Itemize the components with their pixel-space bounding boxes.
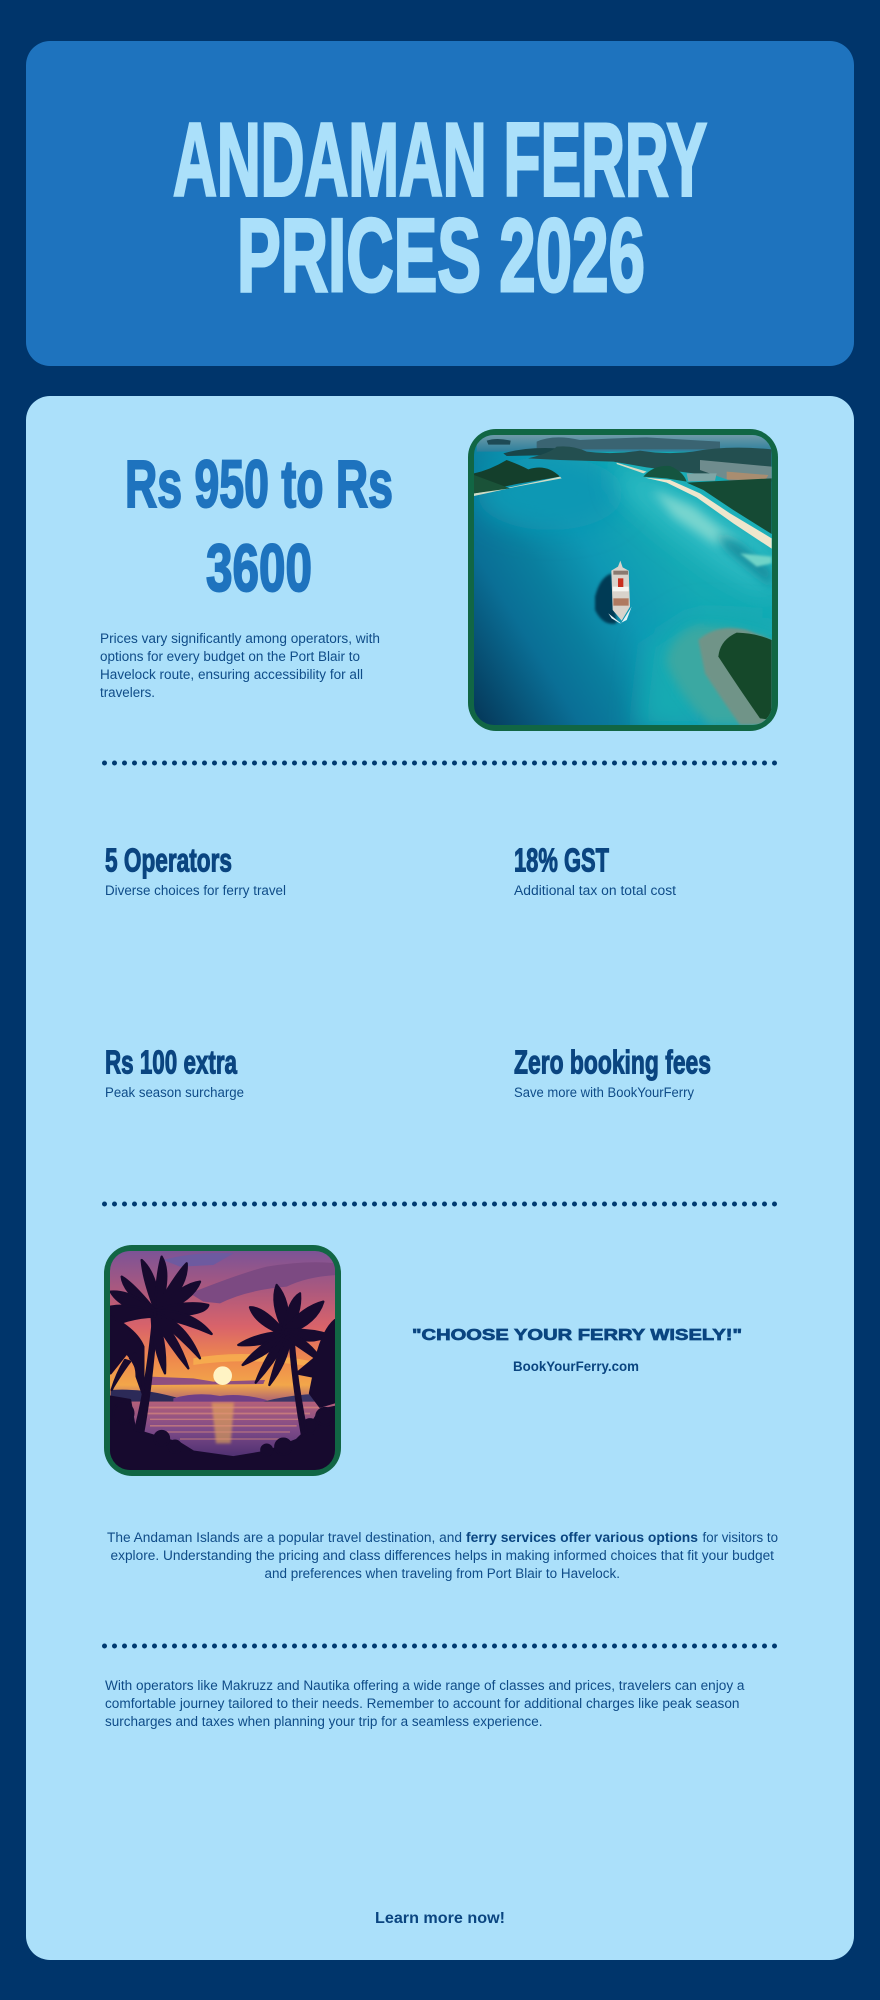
intro paragraph: for visitors to xyxy=(702,1530,778,1545)
closing paragraph xyxy=(105,1678,745,1729)
image: ferry in turquoise bay xyxy=(468,429,778,731)
stat: booking fees: Zero booking fees xyxy=(514,1044,711,1080)
price heading: Rs 950 to Rs xyxy=(125,447,393,522)
title xyxy=(173,102,707,314)
stat: booking fees xyxy=(514,1044,711,1100)
stat: operators: Diverse choices for ferry travel xyxy=(105,883,286,898)
intro paragraph: and preferences when traveling from Port Blair to Havelock. xyxy=(264,1566,620,1581)
panel: title header xyxy=(26,41,854,366)
stat: GST: Additional tax on total cost xyxy=(514,883,676,898)
intro paragraph xyxy=(107,1530,778,1581)
stat: booking fees: Save more with BookYourFerry xyxy=(514,1085,694,1100)
price description text xyxy=(100,631,380,700)
stat: GST xyxy=(514,842,676,898)
price description text: Havelock route, ensuring accessibility for all xyxy=(100,667,363,682)
intro paragraph: ferry services offer various options xyxy=(466,1530,698,1545)
price heading xyxy=(125,447,393,606)
panel: main content xyxy=(26,396,854,1960)
stat: peak surcharge: Rs 100 extra xyxy=(105,1044,237,1080)
price description text: travelers. xyxy=(100,685,155,700)
image: tropical sunset with palms xyxy=(104,1245,341,1476)
closing paragraph: With operators like Makruzz and Nautika offering a wide range of classes and prices, travelers can enjoy a xyxy=(105,1678,745,1693)
price description text: Prices vary significantly among operators, with xyxy=(100,631,380,646)
stat: peak surcharge: Peak season surcharge xyxy=(105,1085,244,1100)
price heading: 3600 xyxy=(206,531,312,606)
callout: choose your ferry: BookYourFerry.com xyxy=(513,1358,639,1374)
closing paragraph: comfortable journey tailored to their needs. Remember to account for additional charges like peak season xyxy=(105,1696,740,1711)
intro paragraph: explore. Understanding the pricing and class differences helps in making informed choices that fit your budget xyxy=(110,1548,774,1563)
palms and foliage silhouette xyxy=(110,1257,337,1473)
callout: choose your ferry: "CHOOSE YOUR FERRY WISELY!" xyxy=(412,1327,742,1344)
stat: GST: 18% GST xyxy=(514,842,609,878)
stat: operators xyxy=(105,842,286,898)
closing paragraph: surcharges and taxes when planning your trip for a seamless experience. xyxy=(105,1714,542,1729)
call to action: Learn more now! xyxy=(375,1910,505,1927)
intro paragraph: The Andaman Islands are a popular travel destination, and xyxy=(107,1530,462,1545)
price description text: options for every budget on the Port Blair to xyxy=(100,649,360,664)
stat: operators: 5 Operators xyxy=(105,842,232,878)
stat: peak surcharge xyxy=(105,1044,244,1100)
title: PRICES 2026 xyxy=(237,198,645,314)
callout: choose your ferry xyxy=(412,1327,742,1374)
